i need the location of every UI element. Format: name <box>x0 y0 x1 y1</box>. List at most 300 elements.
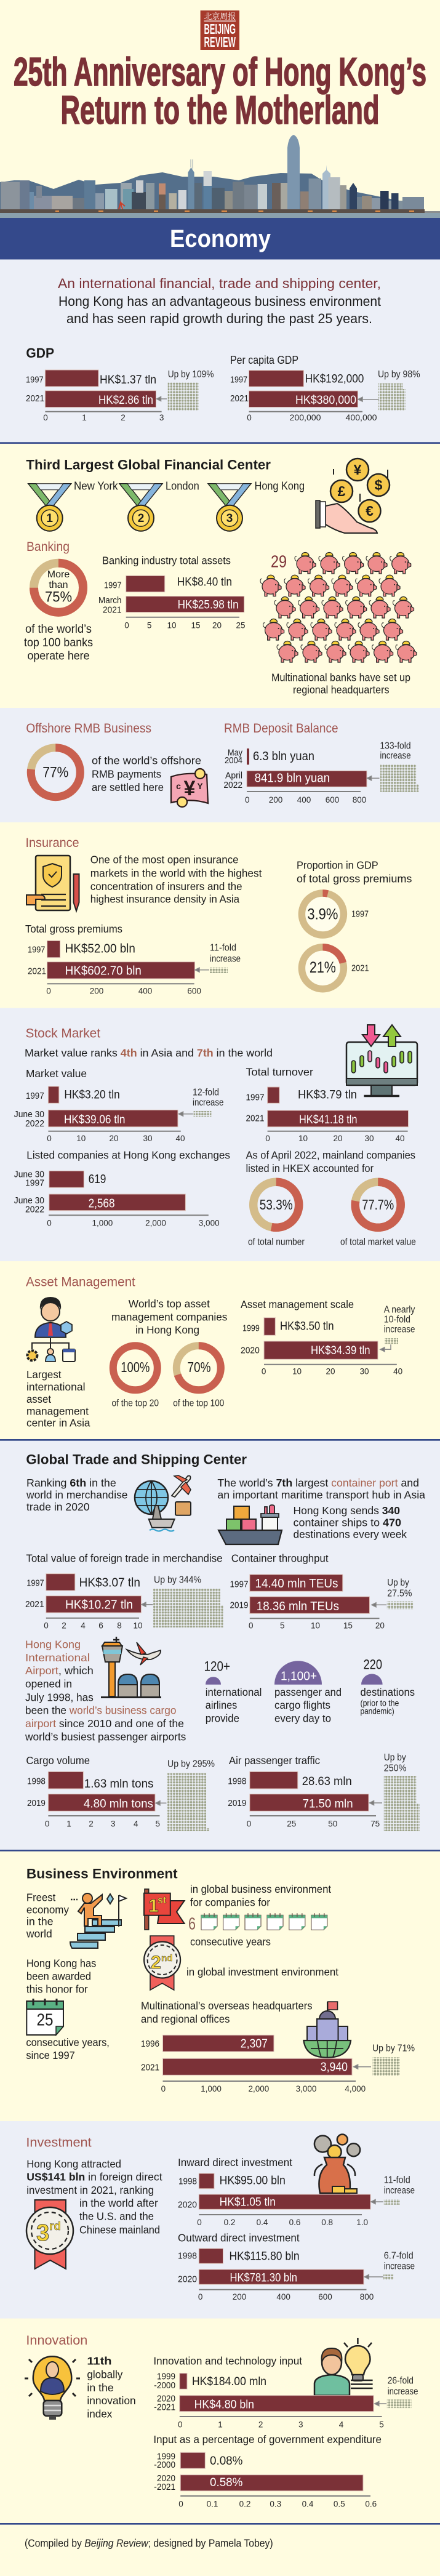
icon: calendar 25 <box>26 1999 63 2035</box>
chart: market value: HK$39.06 tln <box>64 1113 125 1126</box>
text: offshore payments: are settled here <box>92 781 164 793</box>
chart: input as a percentage of government expenditure: 2020 <box>157 2473 175 2484</box>
text: FDI ranking: in the world after <box>79 2197 158 2209</box>
chart: RMB deposit balance: 800 <box>353 795 366 804</box>
chart: air passenger traffic: Up by <box>384 1752 406 1763</box>
chart: GDP <box>26 345 214 422</box>
chart: RMB deposit balance: May <box>228 748 242 758</box>
chart: banking industry total assets: 1997 <box>104 580 122 591</box>
chart: listed companies: 2,568 <box>89 1197 114 1211</box>
text: Hong Kong International Airport: July 1998, has <box>25 1691 94 1703</box>
donuts: proportion in GDP of total gross premiums <box>297 859 412 989</box>
chart: total gross premiums: increase <box>210 953 241 964</box>
chart: asset management scale: 40 <box>393 1367 402 1376</box>
donuts: top 20 and top 100: of the top 20 <box>112 1398 159 1408</box>
donut: 77%: 77% <box>42 764 68 781</box>
chart: per capita GDP: Per capita GDP <box>230 354 298 366</box>
chart: total gross premiums <box>25 923 241 995</box>
chart: RMB deposit balance: 200 <box>269 795 282 804</box>
chart: banking industry total assets <box>98 555 246 630</box>
chart: total gross premiums: 400 <box>138 986 152 995</box>
pictogram: airlines, flights and destinations: 220 <box>363 1657 382 1672</box>
chart: input as a percentage of government expenditure: 0.08% <box>210 2455 243 2468</box>
heading: Asset Management <box>26 1275 135 1289</box>
text: container ships: container ships to 470 <box>293 1516 401 1528</box>
chart: inward direct investment: Inward direct investment <box>178 2156 292 2169</box>
heading: Business Environment <box>26 1866 178 1882</box>
text: Hong Kong International Airport: International <box>25 1651 90 1664</box>
text: container port: The world’s 7th largest container port and <box>217 1477 419 1489</box>
pictogram: airlines, flights and destinations: airlines <box>206 1699 238 1711</box>
text: largest international asset management center: Largest <box>26 1368 62 1381</box>
chart: input as a percentage of government expenditure: 0 <box>178 2499 183 2508</box>
chart: outward direct investment: 400 <box>276 2292 290 2301</box>
chart: RMB deposit balance: April <box>225 770 242 780</box>
chart: outward direct investment: increase <box>384 2261 415 2272</box>
chart: market value: 40 <box>175 1134 185 1143</box>
text: freest economy <box>26 1891 69 1940</box>
icon: container ship <box>218 1505 282 1544</box>
chart: inward direct investment: 11-fold <box>384 2175 410 2186</box>
text: consecutive years since 1997: consecutive years, <box>26 2036 110 2048</box>
chart: market value: 0 <box>47 1134 52 1143</box>
text: top 100 banks: of the world’s <box>25 623 92 636</box>
donuts: top 20 and top 100 <box>112 1346 225 1408</box>
donuts: mainland companies in HKEX: of total market value <box>340 1237 416 1247</box>
chart: total turnover: 30 <box>364 1134 374 1143</box>
chart: banking industry total assets: 10 <box>167 621 177 630</box>
chart: input as a percentage of government expenditure <box>153 2433 382 2508</box>
donuts: top 20 and top 100: 100% <box>121 1359 150 1375</box>
chart: input as a percentage of government expenditure: -2000 <box>154 2460 175 2470</box>
chart: banking industry total assets: HK$8.40 tln <box>177 576 232 589</box>
chart: listed companies: 3,000 <box>199 1219 220 1228</box>
chart: outward direct investment: 6.7-fold <box>384 2250 414 2261</box>
text: first in global business environment: for companies for <box>190 1896 270 1909</box>
ranking medals <box>28 479 305 531</box>
chart: overseas headquarters and regional offices <box>141 1999 415 2093</box>
chart: total value of foreign trade: 4 <box>81 1621 86 1631</box>
icon: 3rd medal: rd <box>49 2220 61 2233</box>
chart: overseas headquarters and regional offices: 3,940 <box>321 2060 348 2074</box>
donuts: proportion in GDP of total gross premiums: Proportion in GDP <box>297 859 378 872</box>
text: 11th globally <box>87 2355 136 2420</box>
chart: cargo volume: 3 <box>111 1819 116 1828</box>
panel: third largest global financial center <box>24 457 417 696</box>
text: ranking 6th <box>26 1477 128 1513</box>
chart: outward direct investment: Outward direct investment <box>178 2232 300 2244</box>
chart: market value: 30 <box>143 1134 153 1143</box>
pictogram: airlines, flights and destinations: every day to <box>274 1712 331 1725</box>
chart: GDP: 3 <box>159 413 164 422</box>
chart: air passenger traffic: 25 <box>287 1819 296 1828</box>
icon: asset manager <box>27 1297 75 1362</box>
donuts: proportion in GDP of total gross premiums: 21% <box>310 959 336 976</box>
chart: banking industry total assets: 20 <box>212 621 222 630</box>
text: container ships: destinations every week <box>293 1528 407 1541</box>
text: 11th globally: 11th <box>87 2355 112 2367</box>
chart: asset management scale: HK$34.39 tln <box>311 1344 370 1357</box>
chart: total value of foreign trade: HK$3.07 tln <box>79 1576 140 1589</box>
pictogram: airlines, flights and destinations: international <box>206 1686 262 1698</box>
chart: air passenger traffic: 50 <box>328 1819 337 1828</box>
chart: container throughput: 18.36 mln TEUs <box>257 1600 339 1613</box>
chart: container throughput: 2019 <box>230 1600 249 1610</box>
chart: inward direct investment: 1.0 <box>356 2218 368 2227</box>
chart: innovation and technology input: 1 <box>218 2420 223 2429</box>
text: Hong Kong International Airport: airport since 2010 and one of the <box>25 1717 184 1730</box>
text: FDI ranking: US$141 bln in foreign direct <box>26 2170 162 2183</box>
divider: blue rule <box>0 1850 440 1852</box>
chart: inward direct investment: HK$95.00 bln <box>220 2174 286 2187</box>
text: offshore payments: of the world’s offshore <box>92 755 201 767</box>
chart: listed companies: 2,000 <box>145 1219 166 1228</box>
chart: air passenger traffic: 1998 <box>228 1776 246 1786</box>
chart: outward direct investment: 2020 <box>178 2274 197 2284</box>
donuts: proportion in GDP of total gross premiums: 1997 <box>351 909 369 919</box>
chart: total value of foreign trade: HK$10.27 tln <box>65 1598 133 1611</box>
chart: RMB deposit balance: 2004 <box>225 755 242 766</box>
chart: overseas headquarters and regional offices: 3,000 <box>296 2084 316 2093</box>
chart: inward direct investment: HK$1.05 tln <box>220 2196 276 2209</box>
chart: cargo volume: 5 <box>156 1819 160 1828</box>
text: container ships: Hong Kong sends 340 <box>293 1504 400 1517</box>
chart: market value: increase <box>193 1097 223 1108</box>
text: Hong Kong has been awarded: Hong Kong has <box>26 1957 97 1970</box>
donut: more than 75%: More <box>47 569 70 580</box>
chart: input as a percentage of government expenditure: 0.3 <box>270 2499 281 2508</box>
band: Economy: Economy <box>170 225 271 252</box>
chart: outward direct investment: HK$781.30 bln <box>230 2272 297 2285</box>
chart: air passenger traffic: 0 <box>247 1819 251 1828</box>
chart: banking industry total assets: 25 <box>236 621 246 630</box>
chart: total gross premiums: HK$52.00 bln <box>65 942 135 956</box>
chart: innovation and technology input <box>153 2355 418 2429</box>
text: FDI ranking: the U.S. and the <box>79 2210 154 2223</box>
text: top 100 banks: operate here <box>27 650 90 663</box>
chart: listed companies: Listed companies at Hong Kong exchanges <box>26 1149 230 1161</box>
chart: cargo volume: 1998 <box>27 1776 46 1786</box>
donuts: mainland companies in HKEX: of total number <box>248 1237 305 1247</box>
ranking medals: Hong Kong <box>255 479 305 492</box>
chart: total turnover: 10 <box>298 1134 308 1143</box>
chart: container throughput: 10 <box>311 1621 320 1631</box>
heading: RMB deposit balance: RMB Deposit Balance <box>224 721 338 736</box>
chart: total gross premiums: 600 <box>187 986 201 995</box>
icon: airport tower and plane <box>101 1637 161 1698</box>
chart: cargo volume: Cargo volume <box>26 1754 90 1767</box>
chart: per capita GDP: HK$192,000 <box>305 373 364 386</box>
icon: yuan banknote <box>171 769 208 807</box>
chart: outward direct investment: 0 <box>198 2292 202 2301</box>
text: world's top asset management companies <box>111 1298 228 1336</box>
icon: person with idea <box>314 2338 373 2396</box>
chart: inward direct investment <box>178 2156 415 2227</box>
text: world's top asset management companies: in Hong Kong <box>135 1324 199 1336</box>
chart: total value of foreign trade: 8 <box>117 1621 122 1631</box>
chart: container throughput: 1997 <box>230 1579 249 1589</box>
heading: Third Largest Global Financial Center <box>26 457 271 473</box>
text: consecutive years since 1997: since 1997 <box>26 2049 75 2061</box>
chart: total value of foreign trade: 1997 <box>26 1578 44 1589</box>
chart: market value: 10 <box>76 1134 86 1143</box>
donuts: proportion in GDP of total gross premiums: of total gross premiums <box>297 872 412 885</box>
chart: total turnover <box>246 1066 409 1143</box>
chart: asset management scale: 0 <box>262 1367 266 1376</box>
chart: per capita GDP: 1997 <box>230 375 247 385</box>
chart: asset management scale: 10-fold <box>384 1314 410 1325</box>
text: Hong Kong International Airport <box>25 1639 186 1743</box>
chart: container throughput <box>230 1552 414 1631</box>
text: second in global investment environment: in global investment environment <box>186 1965 338 1978</box>
chart: listed companies: June 30 <box>14 1169 44 1179</box>
chart: outward direct investment: 200 <box>233 2292 246 2301</box>
text: ranking 6th: trade in 2020 <box>26 1501 90 1513</box>
chart: overseas headquarters and regional offices: Up by 71% <box>372 2044 415 2054</box>
logo: Beijing Review <box>201 10 239 50</box>
chart: asset management scale: increase <box>384 1324 415 1334</box>
text: FDI ranking: investment in 2021, ranking <box>26 2184 154 2196</box>
chart: asset management scale: A nearly <box>384 1305 415 1315</box>
chart: banking industry total assets: Banking industry total assets <box>102 555 231 567</box>
chart: asset management scale: 30 <box>359 1367 369 1376</box>
chart: GDP: GDP <box>26 345 54 361</box>
chart: cargo volume: 4 <box>134 1819 138 1828</box>
ranking medals: London <box>166 479 199 492</box>
chart: total gross premiums: 0 <box>46 986 51 995</box>
text: 11th globally: in the <box>87 2381 114 2394</box>
text: largest international asset management center: management <box>26 1405 89 1417</box>
chart: inward direct investment: 0 <box>197 2218 202 2227</box>
credit line: (Compiled by Beijing Review; designed by Pamela Tobey) <box>25 2537 273 2549</box>
chart: inward direct investment: 1998 <box>178 2176 197 2186</box>
chart: container throughput: Up by <box>387 1578 409 1588</box>
pictogram: airlines, flights and destinations: (prior to the <box>361 1698 399 1708</box>
donuts: top 20 and top 100: of the top 100 <box>173 1398 225 1408</box>
chart: outward direct investment: HK$115.80 bln <box>229 2250 300 2263</box>
chart: outward direct investment: 800 <box>360 2292 374 2301</box>
chart: total turnover: HK$41.18 tln <box>299 1113 357 1126</box>
chart: asset management scale: Asset management scale <box>241 1298 354 1310</box>
divider: blue rule <box>0 442 440 444</box>
chart: air passenger traffic: Air passenger traffic <box>229 1754 320 1767</box>
chart: cargo volume: Up by 295% <box>167 1759 215 1770</box>
panel: insurance <box>0 822 440 1008</box>
donut: more than 75%: than <box>49 580 68 590</box>
icon: calendar 25: 25 <box>37 2010 53 2029</box>
chart: container throughput: 20 <box>375 1621 385 1631</box>
chart: total gross premiums: Total gross premiums <box>25 923 122 935</box>
chart: overseas headquarters and regional offices: 2021 <box>141 2062 159 2072</box>
text: Hong Kong International Airport: world’s busiest passenger airports <box>25 1731 186 1743</box>
text: Hong Kong has been awarded: been awarded <box>26 1970 91 1983</box>
donuts: mainland companies in HKEX: 77.7% <box>362 1197 394 1213</box>
chart: cargo volume: 4.80 mln tons <box>84 1798 153 1811</box>
icon: light bulb with person <box>25 2356 80 2420</box>
text: ranking 6th: Ranking 6th in the <box>26 1477 116 1489</box>
chart: GDP: 1997 <box>26 375 44 385</box>
chart: asset management scale: 2020 <box>241 1345 260 1355</box>
chart: per capita GDP: Up by 98% <box>378 369 420 380</box>
icon: 3rd medal <box>26 2200 73 2269</box>
ranking medals: 2 <box>138 512 144 525</box>
logo: Beijing Review: REVIEW <box>204 34 236 50</box>
chart: container throughput: Container throughput <box>231 1552 329 1565</box>
divider: blue rule <box>0 2523 440 2525</box>
heading: Investment <box>26 2135 92 2149</box>
chart: banking industry total assets: HK$25.98 tln <box>178 599 239 612</box>
text: insurance description: markets in the world with the highest <box>90 867 262 879</box>
chart: listed companies: 1,000 <box>92 1219 113 1228</box>
text: Hong Kong International Airport: opened in <box>25 1678 72 1690</box>
chart: overseas headquarters and regional offices: 0 <box>161 2084 166 2093</box>
chart: per capita GDP: 0 <box>247 413 252 422</box>
chart: asset management scale: HK$3.50 tln <box>280 1320 334 1333</box>
donut: 77% <box>31 748 80 797</box>
text: ranking 6th: world in merchandise <box>26 1488 128 1501</box>
panel: header <box>0 10 440 218</box>
donuts: proportion in GDP of total gross premiums: 2021 <box>351 963 369 974</box>
text: first in global business environment: 6 <box>188 1914 196 1933</box>
icon: 2nd medal: nd <box>161 1953 172 1964</box>
chart: total turnover: 20 <box>333 1134 343 1143</box>
chart: innovation and technology input: -2000 <box>154 2380 175 2391</box>
chart: overseas headquarters and regional offices: 1,000 <box>201 2084 222 2093</box>
text: Hong Kong has been awarded: this honor for <box>26 1983 88 1996</box>
panel: innovation <box>0 2319 440 2524</box>
chart: listed companies <box>14 1149 230 1228</box>
chart: market value: 12-fold <box>193 1087 219 1097</box>
chart: RMB deposit balance: 600 <box>326 795 339 804</box>
text: freest economy: economy <box>26 1903 69 1916</box>
chart: cargo volume: 1.63 mln tons <box>84 1778 153 1791</box>
icon: 2nd medal: 2 <box>151 1952 161 1973</box>
chart: total turnover: 2021 <box>246 1113 265 1124</box>
logo: Beijing Review: BEIJING <box>204 21 236 37</box>
text: insurance description <box>90 854 262 905</box>
chart: total value of foreign trade: 10 <box>133 1621 143 1631</box>
chart: banking industry total assets: 2021 <box>103 605 122 616</box>
heading: Offshore RMB Business <box>26 721 151 736</box>
chart: outward direct investment: 1998 <box>178 2250 197 2261</box>
icon: yuan banknote: ¥ <box>184 777 196 800</box>
donuts: top 20 and top 100: 70% <box>187 1359 210 1375</box>
panel: investment <box>0 2121 440 2319</box>
chart: inward direct investment: increase <box>384 2185 415 2196</box>
chart: per capita GDP: 200,000 <box>289 413 321 422</box>
panel: asset management <box>0 1261 440 1439</box>
chart: GDP: 1 <box>82 413 87 422</box>
chart: market value: June 30 <box>14 1109 44 1120</box>
donuts: mainland companies in HKEX: listed in HKEX accounted for <box>246 1162 374 1174</box>
text: Hong Kong has been awarded <box>26 1957 97 1996</box>
chart: total gross premiums: 2021 <box>28 966 46 976</box>
chart: total turnover: 1997 <box>246 1092 265 1102</box>
chart: input as a percentage of government expenditure: 0.6 <box>365 2499 377 2508</box>
chart: banking industry total assets: March <box>98 595 122 606</box>
chart: total turnover: HK$3.79 tln <box>298 1088 357 1101</box>
chart: input as a percentage of government expenditure: 0.2 <box>239 2499 250 2508</box>
band: Economy <box>0 218 440 260</box>
chart: container throughput: 0 <box>249 1621 253 1631</box>
chart: banking industry total assets: 5 <box>147 621 151 630</box>
text: FDI ranking: Chinese mainland <box>79 2223 160 2236</box>
text: world's top asset management companies: World’s top asset <box>129 1298 210 1310</box>
chart: asset management scale: 10 <box>292 1367 302 1376</box>
chart: total value of foreign trade: 6 <box>98 1621 103 1631</box>
chart: cargo volume <box>26 1754 215 1831</box>
chart: total turnover: Total turnover <box>246 1066 313 1078</box>
icon: coins over hand: € <box>366 503 374 519</box>
chart: per capita GDP: 2021 <box>230 393 249 404</box>
chart: overseas headquarters and regional offices: and regional offices <box>141 2013 230 2025</box>
text: insurance description: highest insurance density in Asia <box>90 893 239 905</box>
text: freest economy: world <box>26 1927 52 1940</box>
icon: yuan banknote: c <box>176 781 181 791</box>
text: largest international asset management center <box>26 1368 90 1429</box>
chart: total value of foreign trade: Up by 344% <box>154 1575 201 1586</box>
chart: GDP: 2 <box>121 413 126 422</box>
intro text: Hong Kong has an advantageous business environment <box>58 294 381 309</box>
chart: input as a percentage of government expenditure: 1999 <box>157 2452 175 2462</box>
chart: innovation and technology input: HK$184.00 mln <box>192 2375 266 2388</box>
chart: total gross premiums: 1997 <box>28 944 45 955</box>
donut: more than 75% <box>34 563 83 612</box>
text: freest economy: Freest <box>26 1891 55 1903</box>
chart: market value: 20 <box>109 1134 119 1143</box>
chart: innovation and technology input: 1999 <box>157 2372 175 2382</box>
chart: air passenger traffic: 28.63 mln <box>302 1775 352 1788</box>
chart: market value: Market value <box>26 1067 87 1080</box>
chart: RMB deposit balance: 6.3 bln yuan <box>253 750 314 763</box>
logo: Beijing Review: 北京周报 <box>204 10 236 22</box>
chart: container throughput: 5 <box>280 1621 284 1631</box>
donuts: proportion in GDP of total gross premiums: 3.9% <box>307 905 338 923</box>
intro text: An international financial, trade and shipping center, <box>58 276 381 291</box>
text: top 100 banks: top 100 banks <box>24 636 93 649</box>
chart: market value <box>14 1067 223 1143</box>
chart: container throughput: 14.40 mln TEUs <box>255 1577 338 1591</box>
chart: input as a percentage of government expenditure: Input as a percentage of government expenditure <box>153 2433 382 2446</box>
chart: RMB deposit balance <box>223 741 419 804</box>
chart: market value: HK$3.20 tln <box>64 1088 120 1101</box>
text: largest international asset management center: asset <box>26 1393 51 1405</box>
chart: cargo volume: 2 <box>89 1819 94 1828</box>
chart: air passenger traffic: 2019 <box>228 1798 246 1808</box>
chart: RMB deposit balance: increase <box>380 750 411 761</box>
chart: innovation and technology input: 0 <box>178 2420 183 2429</box>
pictogram: airlines, flights and destinations: cargo flights <box>274 1699 330 1711</box>
chart: asset management scale: 20 <box>326 1367 335 1376</box>
chart: air passenger traffic <box>228 1752 420 1831</box>
chart: market value: 2022 <box>25 1118 44 1129</box>
text: Hong Kong International Airport: Airport, which <box>25 1664 94 1677</box>
chart: inward direct investment: 0.8 <box>321 2218 333 2227</box>
heading: Innovation <box>26 2333 87 2348</box>
icon: 3rd medal: 3 <box>36 2220 49 2246</box>
panel: stock market <box>0 1008 440 1261</box>
chart: listed companies: 2022 <box>25 1204 44 1214</box>
chart: inward direct investment: 2020 <box>178 2200 197 2210</box>
icon: headquarters on globe <box>303 2002 351 2058</box>
pictogram: airlines, flights and destinations: pandemic) <box>361 1706 394 1715</box>
text: world's top asset management companies: management companies <box>111 1311 228 1323</box>
chart: inward direct investment: 0.2 <box>224 2218 235 2227</box>
text: freest economy: in the <box>26 1916 54 1928</box>
ranking medals: New York <box>74 479 118 492</box>
text: top 100 banks <box>24 623 93 663</box>
chart: overseas headquarters and regional offices: 2,307 <box>241 2037 268 2051</box>
